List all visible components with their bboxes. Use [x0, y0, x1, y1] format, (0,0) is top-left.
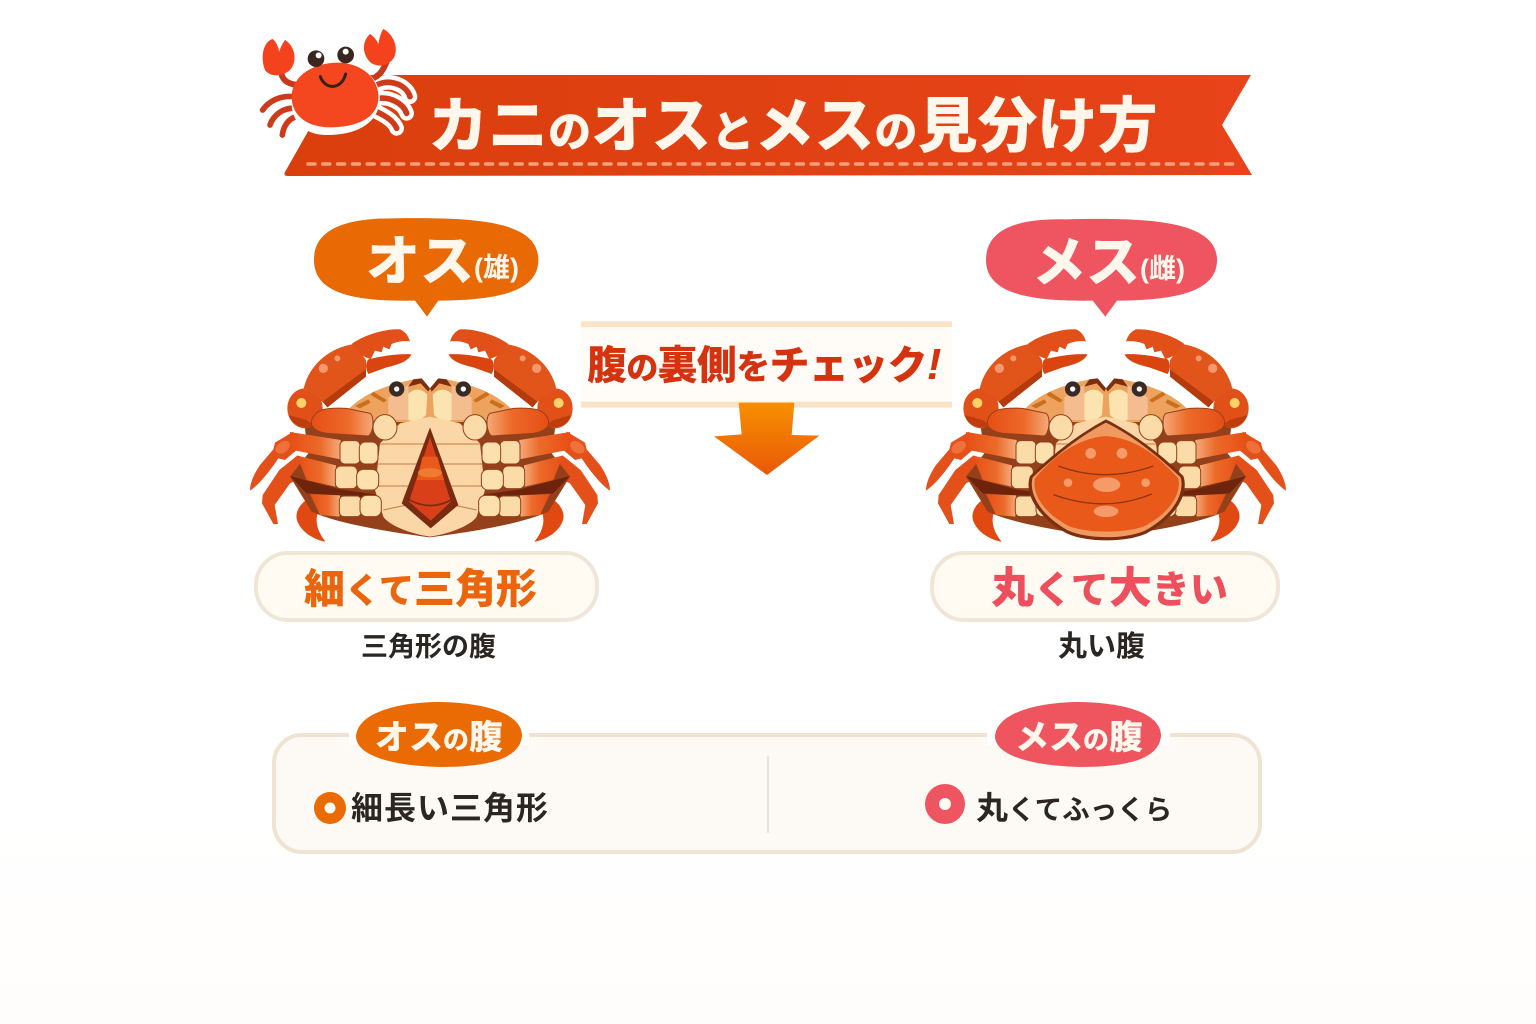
- female label: メス(雌): [1032, 233, 1185, 293]
- callout band: check the underside: [581, 321, 952, 408]
- title banner: [284, 75, 1252, 176]
- male list item: 細長い三角形: [351, 790, 549, 826]
- arrow down: [714, 402, 820, 475]
- male heading: オスの腹: [375, 719, 503, 757]
- divider and heading pills: [349, 702, 1170, 833]
- pill: male abdomen shape: [254, 551, 599, 622]
- callout text: 腹の裏側をチェック!: [587, 340, 941, 389]
- pill: female abdomen shape: [930, 551, 1280, 622]
- male label: オス(雄): [366, 232, 519, 292]
- crab: female underside: [926, 329, 1286, 542]
- male pill text: 細くて三角形: [304, 566, 537, 612]
- icon: female marker: [925, 784, 965, 824]
- icon: mascot crab: [260, 29, 418, 138]
- speech bubble: male: [314, 218, 538, 316]
- female list item: 丸くてふっくら: [976, 790, 1172, 826]
- panel: summary: [272, 733, 1262, 854]
- caption: female: 丸い腹: [1058, 631, 1145, 663]
- female pill text: 丸くて大きい: [991, 565, 1228, 613]
- female heading: メスの腹: [1015, 719, 1143, 757]
- speech bubble: female: [986, 218, 1217, 316]
- title: カニのオスとメスの見分け方: [428, 93, 1158, 160]
- icon: male marker: [314, 792, 346, 824]
- crab: male underside: [250, 329, 610, 542]
- caption: male: 三角形の腹: [361, 632, 496, 662]
